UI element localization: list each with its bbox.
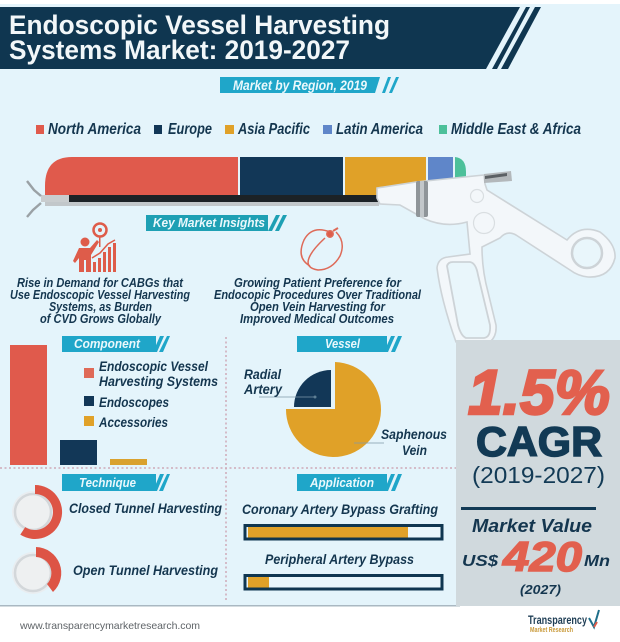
pie chart: vessel [259, 362, 384, 457]
heading: vessel: Vessel [325, 336, 360, 351]
heading: vessel [297, 336, 402, 352]
legend: component: Endoscopic Vessel [99, 358, 209, 374]
text: insight one: of CVD Grows Globally [40, 311, 162, 326]
title [9, 10, 390, 65]
number: market value amount: US$ [462, 553, 499, 570]
legend: regions: Asia Pacific [237, 121, 310, 138]
progress bar: peripheral [245, 576, 442, 589]
heading: application: Application [309, 475, 374, 490]
number: market value amount: Mn [584, 553, 610, 570]
text: insight one: Systems, as Burden [49, 299, 152, 314]
heading: key market insights: Key Market Insights [153, 215, 265, 230]
logo [528, 610, 599, 634]
panel: component [10, 336, 218, 465]
label: radial artery [243, 367, 283, 397]
label: saphenous vein [381, 426, 447, 458]
legend: regions: Middle East & Africa [451, 121, 581, 138]
legend: regions: North America [48, 121, 141, 138]
text: insight two: Open Vein Harvesting for [250, 299, 386, 314]
text: insight two: Growing Patient Preference for [234, 275, 402, 290]
panel: technique [12, 474, 222, 594]
chart: region stacked bar [45, 157, 466, 195]
icon: vessel harvester instrument [27, 171, 615, 342]
legend: component: Accessories [98, 414, 168, 430]
title: Systems Market: 2019-2027 [9, 35, 350, 65]
text: insight two [214, 275, 421, 326]
donut: closed tunnel [12, 485, 62, 539]
legend: component: Endoscopes [99, 394, 169, 410]
heading: component [62, 336, 170, 352]
panel: application [242, 474, 442, 589]
title: Endoscopic Vessel Harvesting [9, 10, 390, 40]
text: insight two: Improved Medical Outcomes [240, 311, 394, 326]
text: market value: Market Value [472, 516, 592, 536]
heading: technique: Technique [79, 475, 136, 490]
legend: component: Harvesting Systems [99, 373, 218, 389]
label: radial artery: Artery [243, 382, 283, 397]
text: insight one: Rise in Demand for CABGs that [17, 275, 184, 290]
heading: component: Component [74, 336, 141, 351]
text: value year: (2027) [520, 582, 561, 597]
heading: application [297, 474, 402, 491]
text: period: (2019-2027) [472, 462, 605, 488]
progress bar: coronary [245, 526, 442, 539]
legend: regions: Europe [168, 121, 212, 138]
number: market value amount: 420 [502, 533, 582, 580]
heading: market by region: Market by Region, 2019 [233, 78, 367, 93]
text: insight one [10, 275, 190, 326]
footer url: www.transparencymarketresearch.com [19, 620, 200, 632]
text: insight two: Endocopic Procedures Over Traditional [214, 287, 421, 302]
label: saphenous vein: Saphenous [381, 426, 447, 442]
number: market value amount [462, 533, 610, 580]
label: peripheral: Peripheral Artery Bypass [265, 551, 414, 567]
panel: stats [456, 340, 620, 606]
heading: technique [62, 474, 170, 491]
text: CAGR: CAGR [476, 418, 602, 465]
shaft [27, 181, 379, 217]
label: open tunnel: Open Tunnel Harvesting [73, 562, 218, 578]
bar chart: component [10, 345, 147, 465]
legend: regions: Latin America [336, 121, 423, 138]
number: CAGR value: 1.5% [468, 358, 610, 428]
logo: Market Research [530, 625, 573, 634]
logo: Transparency [528, 615, 587, 627]
label: saphenous vein: Vein [402, 442, 427, 458]
icon: rising demand person and chart [73, 224, 116, 272]
label: closed tunnel: Closed Tunnel Harvesting [69, 500, 222, 516]
panel: header banner [0, 7, 541, 69]
legend: regions [36, 121, 581, 138]
text: insight one: Use Endoscopic Vessel Harvesting [10, 287, 190, 302]
panel: vessel [243, 336, 447, 458]
label: coronary: Coronary Artery Bypass Grafting [242, 501, 438, 517]
icon: vein loop [301, 228, 342, 270]
handle [377, 171, 615, 342]
label: radial artery: Radial [244, 367, 281, 382]
legend: component [84, 358, 218, 430]
donut: open tunnel [12, 547, 61, 594]
